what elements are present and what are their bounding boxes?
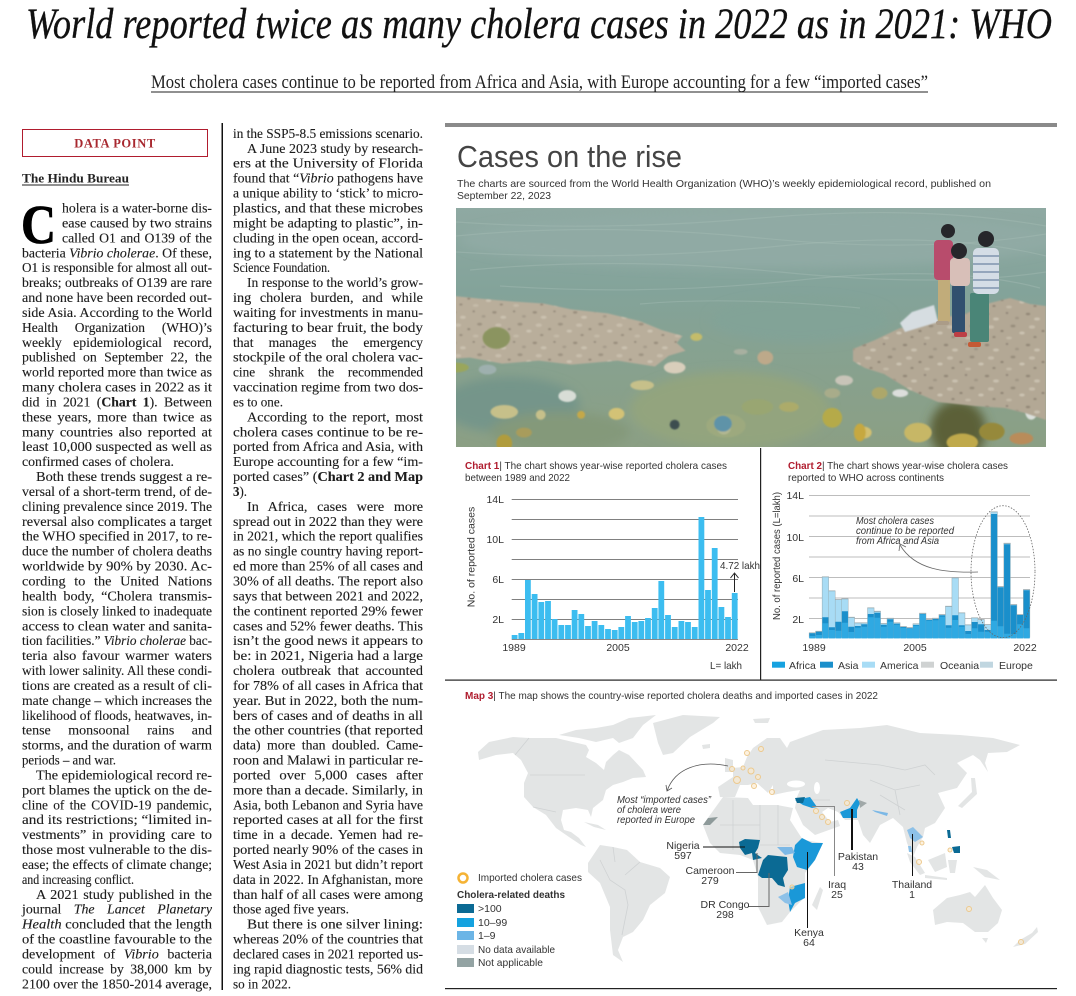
article column 1: [21, 202, 213, 992]
paragraph 7: ported cases” (Chart 2 and Map: [233, 470, 423, 485]
South Sudan: [777, 847, 795, 855]
chart 2 y axis labels: 2L: [792, 614, 804, 626]
chart 2 annotation: continue to be reported: [856, 526, 954, 537]
paragraph 8: cholera outbreak that accounted: [233, 664, 423, 679]
paragraph 8: time in a decade. Yemen had re-: [233, 828, 423, 843]
panel: chart 1: [465, 460, 760, 672]
paragraph 8: [233, 500, 423, 918]
paragraph 2: versal of a short-term trend, of de-: [22, 485, 212, 500]
chart 2 y axis title: No. of reported cases (L=lakh): [771, 492, 783, 620]
callout: 4.72 lakh: [719, 560, 760, 592]
paragraph 3: port blames the uptick on the de-: [22, 783, 212, 798]
label: Iraq: Iraq: [828, 879, 846, 891]
paragraph 1: bacteria Vibrio cholerae. Of these,: [22, 246, 212, 261]
series: Africa: [812, 614, 1027, 638]
chart 2 x axis labels: 2005: [903, 642, 927, 654]
map legend: No data available: [478, 944, 555, 956]
paragraph 8: the continent reported 29% fewer: [233, 604, 423, 619]
paragraph 9: so in 2022.: [233, 977, 291, 992]
panel description: [457, 178, 991, 202]
paragraph 8: in 2021, which the report qualifies: [233, 530, 423, 545]
paragraph 3: ease; the effects of climate change;: [22, 858, 212, 873]
country borders: [515, 738, 935, 935]
paragraph 8: for 78% of all cases in Africa that: [233, 679, 423, 694]
paragraph 8: ported over 5,000 cases after: [233, 768, 423, 784]
chart 2 legend: Asia: [838, 660, 859, 672]
panel: chart 2: [771, 460, 1037, 672]
article column 2: [233, 127, 424, 992]
chart 1 y axis labels: 6L: [492, 574, 504, 586]
chart 2 heading: Chart 2| The chart shows year-wise cholera cases: [788, 460, 1008, 472]
plastic bag: [900, 305, 938, 332]
chart 1 grid: [512, 500, 738, 620]
paragraph 1: many countries also reported at: [22, 425, 212, 440]
paragraph 1: side Asia. According to the World: [22, 306, 212, 321]
paragraph 6: that manages the emergency: [233, 336, 423, 351]
chart 2 annotation: from Africa and Asia: [856, 536, 939, 547]
label box: data point: DATA POINT: [74, 136, 156, 150]
Ethiopia and Somalia: [793, 838, 823, 870]
paragraph 5: ers at the University of Florida: [233, 157, 424, 172]
chart 1 x axis labels: 1989: [502, 642, 526, 654]
paragraph 1: published on September 22, the: [22, 351, 212, 366]
chart 2 heading: reported to WHO across continents: [788, 472, 944, 484]
map legend: 10–99: [478, 917, 507, 929]
paragraph 5: cluding in the open ocean, accord-: [233, 231, 423, 246]
map legend: Imported cholera cases: [478, 872, 582, 884]
paragraph 4: of the coastline favourable to the: [22, 933, 212, 948]
paragraph 1: confirmed cases of cholera.: [22, 455, 174, 470]
chart 1 y axis labels: 10L: [486, 534, 504, 546]
bar outline: [812, 512, 1027, 638]
Pakistan: [840, 798, 860, 818]
chart 1 unit note: L= lakh: [710, 660, 742, 672]
paragraph 4: A 2021 study published in the: [36, 888, 212, 903]
label: Cameroon: 279: [701, 875, 719, 887]
paragraph 2: periods – and war.: [22, 754, 116, 768]
label: Nigeria: [666, 840, 745, 862]
paragraph 2: Both these trends suggest a re-: [36, 470, 212, 485]
right shore: [853, 298, 1046, 420]
paragraph 5: found that “Vibrio pathogens have: [233, 172, 423, 187]
chart 2 legend: Europe: [999, 660, 1033, 672]
paragraph 5: ing to a statement by the National: [233, 246, 423, 261]
label: Nigeria: 597: [674, 850, 692, 862]
paragraph 6: In response to the world’s grow-: [247, 276, 423, 291]
chart 2 legend: Oceania: [940, 660, 979, 672]
imported case markers: [730, 746, 1024, 944]
paragraph 3: [22, 768, 212, 888]
chart 1 y axis title: No. of reported cases: [466, 507, 478, 607]
children: [934, 224, 999, 347]
paragraph 9: [233, 918, 423, 992]
chart 2 annotation: Most cholera cases: [856, 516, 934, 527]
map legend: Cholera-related deaths: [457, 889, 565, 901]
chart 2 x axis labels: 2022: [1013, 642, 1037, 654]
paragraph 2: reversal also complicates a target: [22, 515, 212, 530]
map legend: 1–9: [478, 930, 496, 942]
paragraph 9: whereas 20% of the countries that: [233, 933, 423, 948]
chart 2 heading: [788, 460, 1008, 484]
paragraph 3: vestments” in providing care to: [22, 828, 212, 843]
paragraph 2: with lower salinity. All these condi-: [22, 664, 212, 679]
label: DR Congo: DR Congo: [700, 899, 750, 911]
label: DR Congo: [700, 873, 769, 921]
chart 1 y axis labels: 14L: [486, 494, 504, 506]
paragraph 1: did in 2021 (Chart 1). Between: [22, 396, 212, 410]
paragraph 7: cholera cases continue to be re-: [233, 425, 423, 440]
paragraph 8: more than a decade. Similarly, in: [233, 783, 423, 798]
paragraph 8: bers of cases and of deaths in all: [233, 709, 423, 724]
chart 1 x axis labels: [502, 642, 749, 654]
label: Nigeria: Nigeria: [666, 840, 700, 852]
paragraph 1: breaks; outbreaks of O139 are rare: [22, 276, 212, 291]
chart 1 heading: between 1989 and 2022: [465, 472, 570, 484]
Western Sahara: [703, 817, 718, 825]
paragraph 5: a unique ability to ‘stick’ to micro-: [233, 187, 423, 202]
series: America: [812, 512, 1027, 638]
paragraph 6: facturing to bear fruit, the body: [233, 321, 423, 336]
chart divider: [760, 448, 761, 680]
chart 2 y axis labels: 14L: [786, 490, 804, 502]
paragraph 2: clining prevalence since 2019. The: [22, 500, 212, 515]
paragraph 2: teria also favour warmer waters: [22, 649, 212, 664]
paragraph 5: Science Foundation.: [233, 261, 330, 276]
paragraph 1: [22, 202, 212, 470]
column divider: [222, 123, 223, 990]
paragraph 2: tions are created as a result of cli-: [22, 679, 212, 694]
paragraph 4: could increase by 38,000 km by: [22, 962, 212, 977]
inland seas: [787, 780, 820, 794]
paragraph 1: and none have been recorded out-: [22, 291, 212, 306]
Nepal: [872, 810, 888, 816]
panel description: The charts are sourced from the World Health Organization (WHO)’s weekly epidemiological record, published on: [457, 178, 991, 190]
map annotation: imported cases: Most “imported cases”: [617, 795, 712, 806]
map annotation: imported cases: reported in Europe: [617, 815, 695, 826]
chart 1 baseline: [512, 638, 738, 640]
paragraph 2: worldwide by 90% by 2030. Ac-: [22, 560, 212, 575]
paragraph 1: these years, more than twice as: [22, 410, 212, 425]
paragraph 7: 3).: [233, 485, 247, 500]
chart 2 x axis labels: [802, 642, 1037, 654]
Syria and Lebanon: [795, 797, 805, 803]
paragraph 8: data) more than doubled. Came-: [233, 739, 423, 754]
label: Cameroon: Cameroon: [685, 865, 735, 877]
map heading: Map 3| The map shows the country-wise reported cholera deaths and imported cases in 2022: [465, 690, 878, 702]
paragraph 2: mate change – which increases the: [22, 694, 212, 709]
world map land: [478, 715, 1038, 962]
paragraph 7: [233, 410, 423, 500]
label: Pakistan: [838, 809, 878, 873]
paragraph 6: cine shrank the recommended: [233, 366, 423, 381]
paragraph 4: 2100 over the 1850-2014 average,: [22, 977, 212, 992]
chart 2 x axis labels: 1989: [802, 642, 826, 654]
paragraph 1: weekly epidemiological record,: [22, 336, 212, 351]
ripples: [456, 213, 1046, 308]
floating rocks and rubbish: [456, 332, 1036, 447]
paragraph 8: as no single country having report-: [233, 545, 423, 560]
paragraph 9: But there is one silver lining:: [247, 918, 423, 933]
panel: map 3: [457, 690, 1038, 969]
byline: The Hindu Bureau: [22, 170, 129, 186]
chart 1 bars: [515, 517, 735, 639]
label: Iraq: 25: [831, 889, 843, 901]
paragraph 8: cases and 52% fewer deaths. This: [233, 619, 423, 634]
paragraph 9: ing rapid diagnostic tests, 56% did: [233, 962, 423, 977]
Philippines: [947, 830, 960, 853]
chart 2 legend: Africa: [789, 660, 816, 672]
drop cap: C: [21, 194, 56, 255]
paragraph 8: be: in 2021, Nigeria had a large: [233, 649, 423, 664]
paragraph 2: the WHO specified in 2017, to re-: [22, 530, 212, 545]
callout: 4.72 lakh: 4.72 lakh: [720, 560, 760, 572]
paragraph 1: Health Organization (WHO)’s: [22, 321, 212, 336]
left shore: [456, 296, 1036, 447]
paragraph 8: ed more than 25% of all cases and: [233, 560, 423, 575]
paragraph 6: stockpile of the oral cholera vac-: [233, 351, 423, 366]
paragraph 2: storms, and the duration of warm: [22, 739, 212, 754]
label: Iraq: [812, 806, 846, 901]
map deaths choropleth: [703, 797, 960, 912]
label box: data point: [22, 130, 208, 156]
map annotation: imported cases: of cholera were: [617, 805, 681, 816]
chart 2 stacked bars: [812, 512, 1027, 638]
chart 1 x axis labels: 2022: [725, 642, 749, 654]
paragraph 3: those most vulnerable to the dis-: [22, 843, 212, 858]
paragraph 8: ported nearly 90% of the cases in: [233, 843, 423, 858]
paragraph 2: access to clean water and sanita-: [22, 619, 212, 634]
chart 2 annotation: [856, 506, 1035, 638]
series: Asia: [812, 514, 1027, 638]
paragraph 3: cline of the COVID-19 pandemic,: [22, 798, 212, 813]
Iraq: [795, 797, 817, 808]
paragraph 5: plastics, and that these microbes: [233, 202, 423, 216]
label: Thailand: Thailand: [892, 879, 932, 891]
paragraph 2: duce the number of cholera deaths: [22, 545, 212, 560]
paragraph 5: A June 2023 study by research-: [247, 142, 423, 157]
paragraph 6: ing cholera burden, and while: [233, 291, 423, 306]
Thailand: [907, 827, 923, 852]
water tone patches: [456, 258, 990, 447]
label: Thailand: 1: [909, 889, 915, 901]
Kashmir: [859, 800, 867, 808]
panel heading: Cases on the rise: [457, 139, 682, 174]
paragraph 8: year. But in 2022, both the num-: [233, 694, 423, 709]
panel bottom rule: [445, 988, 1057, 989]
paragraph 1: ease caused by two strains: [62, 216, 212, 231]
paragraph 6: vaccination regime from two dos-: [233, 380, 423, 396]
label: Pakistan: 43: [852, 861, 864, 873]
label: DR Congo: 298: [716, 909, 734, 921]
paragraph 8: 30% of all deaths. The report also: [233, 574, 423, 590]
paragraph 2: likelihood of floods, heatwaves, in-: [22, 709, 212, 724]
paragraph 8: reported cases at all for the first: [233, 813, 423, 828]
panel top rule: [445, 123, 1057, 127]
paragraph 8: says that between 2021 and 2022,: [233, 589, 423, 604]
Zambia: [778, 892, 792, 905]
DR Congo: [758, 855, 788, 887]
chart 2 grid: [809, 496, 1030, 618]
paragraph 6: [233, 276, 423, 410]
label: Kenya: [794, 852, 824, 949]
paragraph 9: declared cases in 2021 reported us-: [233, 948, 423, 962]
chart 1 y axis labels: [486, 494, 504, 626]
paragraph 2: tion facilities.” Vibrio cholerae bac-: [22, 634, 212, 649]
chart 2 legend: [772, 660, 1033, 672]
chart 1 heading: [465, 460, 727, 484]
paragraph 8: than half of all cases were among: [233, 888, 423, 903]
paragraph 4: Health concluded that the length: [21, 918, 212, 933]
paragraph 7: Europe accounting for a few “im-: [233, 455, 423, 470]
paragraph 1: world reported more than twice as: [22, 366, 212, 381]
paragraph 1: O1 is responsible for almost all out-: [22, 261, 212, 276]
chart 1 heading: Chart 1| The chart shows year-wise reported cholera cases: [465, 460, 727, 472]
panel description: September 22, 2023: [457, 190, 551, 202]
paragraph 2: [22, 470, 212, 768]
chart 2 y axis labels: [786, 490, 804, 626]
paragraph 6: es to one.: [233, 396, 283, 410]
paragraph 1: holera is a water-borne dis-: [62, 202, 212, 216]
chart 2 y axis labels: 10L: [786, 532, 804, 544]
paragraph 8: In Africa, cases were more: [247, 500, 423, 515]
paragraph 8: the other countries (that reported: [233, 724, 423, 739]
paragraph 8: isn’t the good news it appears to: [233, 634, 423, 649]
paragraph 4: [21, 888, 213, 992]
paragraph 8: roon and Malawi in particular re-: [233, 754, 423, 768]
label: Kenya: Kenya: [794, 927, 824, 939]
map legend: >100: [478, 903, 502, 915]
Nigeria and Cameroon: [739, 839, 762, 860]
label: Thailand: [892, 834, 932, 901]
paragraph 2: cording to the United Nations: [22, 574, 212, 590]
paragraph 1: least 10,000 suspected as well as: [22, 440, 212, 455]
paragraph 8: Asia, both Lebanon and Syria have: [233, 798, 423, 813]
photo: children by polluted water: [440, 208, 1060, 460]
map annotation: imported cases: [617, 764, 728, 826]
paragraph 2: tense monsoonal rains and: [22, 724, 212, 739]
paragraph 2: sion is closely linked to inadequate: [22, 604, 212, 619]
paragraph 3: The epidemiological record re-: [36, 768, 212, 784]
paragraph 4: development of Vibrio bacteria: [22, 948, 213, 962]
paragraph 3: and its restrictions; “limited in-: [22, 813, 212, 828]
paragraph 8: spread out in 2022 than they were: [233, 515, 423, 530]
paragraph 5: might be adapting to plastic”, in-: [233, 216, 423, 231]
paragraph 7: According to the report, most: [247, 410, 423, 425]
subtitle: Most cholera cases continue to be reported from Africa and Asia, with Europe accounting for a few “imported cases”: [151, 73, 928, 93]
chart 1 x axis labels: 2005: [606, 642, 630, 654]
label: Kenya: 64: [803, 937, 815, 949]
paragraph 2: health body, “Cholera transmis-: [22, 589, 212, 604]
paragraph 4: journal The Lancet Planetary: [21, 903, 213, 918]
Malawi and Mozambique: [788, 883, 805, 912]
chart 2 y axis labels: 6L: [792, 573, 804, 585]
chart 2 legend: America: [880, 660, 919, 672]
paragraph 8: data in 2022. In Afghanistan, more: [233, 873, 423, 888]
chart 1 y axis labels: 2L: [492, 614, 504, 626]
paragraph 6: waiting for investments in manu-: [233, 306, 423, 321]
map legend: Not applicable: [478, 957, 543, 969]
paragraph 8: those aged five years.: [233, 903, 349, 918]
paragraph 5: [233, 127, 424, 276]
map legend: [457, 872, 582, 969]
paragraph 1: called O1 and O139 of the: [62, 231, 212, 246]
paragraph 3: and increasing conflict.: [22, 873, 134, 888]
paragraph 8: West Asia in 2021 but didn’t report: [233, 858, 423, 873]
section rule: [445, 680, 1057, 681]
label: Cameroon: [685, 853, 757, 887]
label: Pakistan: Pakistan: [838, 851, 878, 863]
paragraph 5: in the SSP5-8.5 emissions scenario.: [233, 127, 423, 142]
paragraph 7: ported from Africa and Asia, with: [233, 440, 423, 455]
paragraph 1: many cholera cases in 2022 as it: [22, 380, 212, 396]
